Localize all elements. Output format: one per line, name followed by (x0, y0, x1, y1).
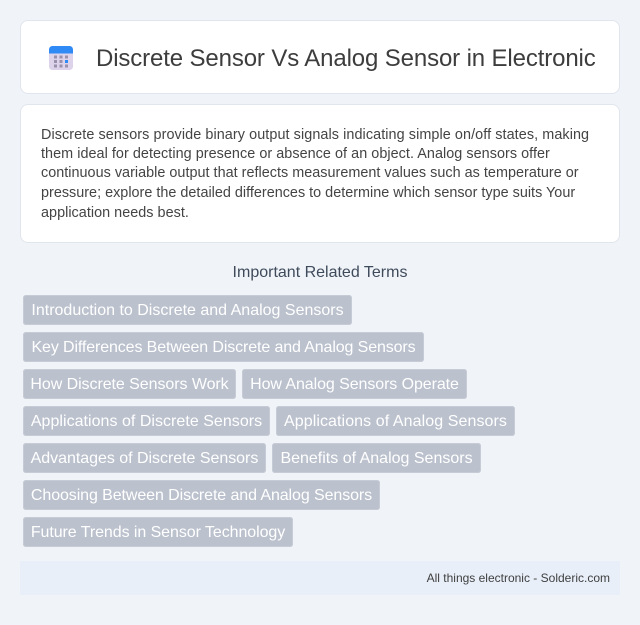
tag (23, 406, 270, 436)
tag (272, 443, 481, 473)
tag (242, 369, 467, 399)
tag: Advantages of Discrete Sensors (31, 450, 258, 467)
tag (23, 295, 352, 325)
tag (23, 443, 266, 473)
text block: summary (41, 127, 589, 221)
tag: Choosing Between Discrete and Analog Sensors (31, 487, 372, 504)
tag: How Discrete Sensors Work (30, 376, 229, 393)
footer bar (20, 561, 620, 595)
tag list (23, 295, 515, 547)
tag (23, 332, 424, 362)
icon: calendar (49, 46, 73, 70)
text block: summary: them ideal for detecting presence or absence of an object. Analog sensors offer (41, 146, 550, 162)
text block: summary: Discrete sensors provide binary output signals indicating simple on/off states, making (41, 127, 589, 143)
title: Discrete Sensor Vs Analog Sensor in Electronic (96, 45, 596, 72)
tag (23, 480, 380, 510)
tag: Applications of Analog Sensors (284, 413, 507, 430)
footer bar: All things electronic - Solderic.com (427, 571, 610, 585)
tag: How Analog Sensors Operate (250, 376, 459, 393)
panel: summary text (20, 104, 620, 243)
tag (23, 369, 236, 399)
tag (23, 517, 293, 547)
tag: Benefits of Analog Sensors (280, 450, 473, 467)
panel: title card (20, 20, 620, 94)
text block: summary: application needs best. (41, 205, 189, 221)
tag: Key Differences Between Discrete and Analog Sensors (31, 339, 416, 356)
tag: Applications of Discrete Sensors (31, 413, 262, 430)
tag (276, 406, 515, 436)
tag: Introduction to Discrete and Analog Sensors (31, 302, 344, 319)
text block: summary: pressure; explore the detailed differences to determine which sensor type suits Your (41, 185, 575, 201)
heading: important related terms: Important Related Terms (233, 264, 407, 281)
text block: summary: continuous variable output that reflects measurement values such as temperature or (41, 165, 579, 181)
tag: Future Trends in Sensor Technology (31, 524, 285, 541)
